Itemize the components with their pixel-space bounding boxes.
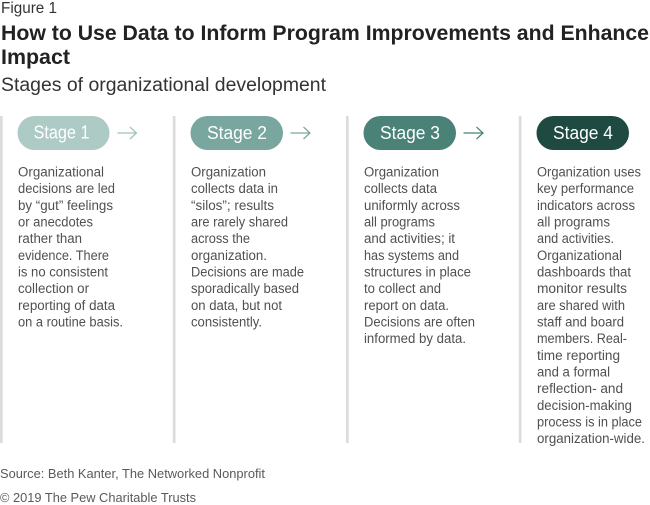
stage 2 description: organization. xyxy=(191,248,267,263)
stage 1 description: by “gut” feelings xyxy=(18,198,113,213)
stage 4 description xyxy=(537,164,645,446)
stage 1 pill xyxy=(18,116,110,150)
stage 2 pill xyxy=(190,116,283,150)
stage 2 description: consistently. xyxy=(191,314,262,330)
panel: stage 1 xyxy=(0,116,136,443)
title: How to Use Data to Inform Program Improvements and Enhance xyxy=(1,22,649,45)
stage 4 description: Organizational xyxy=(537,248,622,263)
stage 3 description: all programs xyxy=(364,214,435,230)
arrow: stage 1 to stage 2 xyxy=(118,127,136,139)
stage 2 description: Decisions are made xyxy=(191,264,304,280)
copyright: © 2019 The Pew Charitable Trusts xyxy=(0,490,196,505)
stage 3 description: report on data. xyxy=(364,298,449,313)
stage 4 description: monitor results xyxy=(537,281,627,296)
source note: Source: Beth Kanter, The Networked Nonprofit xyxy=(0,466,265,481)
stage 3 description: and activities; it xyxy=(364,231,455,246)
subtitle: Stages of organizational development xyxy=(1,75,327,96)
stage 3 description: has systems and xyxy=(364,248,459,263)
stage 3 description: structures in place xyxy=(364,264,471,280)
stage 1 description: is no consistent xyxy=(18,264,108,280)
stage 4 description: members. Real- xyxy=(537,331,627,346)
stage 4 description: dashboards that xyxy=(537,264,631,280)
stage 2 pill: Stage 2 xyxy=(207,123,267,143)
stage 2 description: are rarely shared xyxy=(191,214,288,230)
stage 2 description: on data, but not xyxy=(191,298,282,313)
stage 3 description: to collect and xyxy=(364,281,441,296)
stage 3 description: informed by data. xyxy=(364,331,466,346)
stage 3 pill xyxy=(364,116,456,150)
stage 4 description: organization-wide. xyxy=(537,431,645,446)
stage 3 description xyxy=(364,164,475,346)
stage 4 description: staff and board xyxy=(537,314,624,330)
title: Impact xyxy=(1,46,70,69)
stage 1 description: evidence. There xyxy=(18,248,109,263)
stage 2 description xyxy=(191,164,304,330)
stage 3 pill: Stage 3 xyxy=(380,123,440,143)
stage 1 pill: Stage 1 xyxy=(34,122,90,142)
stage 1 description: or anecdotes xyxy=(18,214,93,230)
stage 4 description: reflection- and xyxy=(537,381,623,396)
stage 2 description: collects data in xyxy=(191,181,278,196)
stage 4 description: and activities. xyxy=(537,231,614,246)
stage 4 description: process is in place xyxy=(537,414,642,430)
stage 3 description: Decisions are often xyxy=(364,314,475,330)
stage 2 description: “silos”; results xyxy=(191,198,274,213)
stage 4 description: all programs xyxy=(537,214,610,230)
panel: stage 4 xyxy=(519,116,645,446)
arrow: stage 2 to stage 3 xyxy=(290,127,310,139)
stage 4 pill xyxy=(536,116,629,150)
stage 4 description: key performance xyxy=(537,181,634,196)
stage 4 pill: Stage 4 xyxy=(553,123,613,143)
figure label: Figure 1 xyxy=(1,0,57,17)
panel: stage 2 xyxy=(173,116,310,443)
stage 3 description: collects data xyxy=(364,181,438,196)
stage 1 description: on a routine basis. xyxy=(18,314,123,330)
stage 2 description: across the xyxy=(191,231,250,246)
stage 3 description: Organization xyxy=(364,164,439,180)
title xyxy=(1,22,649,69)
stage 1 description: rather than xyxy=(18,231,82,246)
stage 2 description: sporadically based xyxy=(191,281,299,296)
stage 3 description: uniformly across xyxy=(364,198,460,213)
stage 4 description: time reporting xyxy=(537,348,620,363)
stage 1 description: reporting of data xyxy=(18,298,116,313)
stage 1 description: decisions are led xyxy=(18,181,115,196)
stage 4 description: and a formal xyxy=(537,364,610,380)
arrow: stage 3 to stage 4 xyxy=(464,127,483,139)
stage 4 description: Organization uses xyxy=(537,164,641,180)
stage 1 description: collection or xyxy=(18,281,90,296)
stage 4 description: indicators across xyxy=(537,198,635,213)
panel: stage 3 xyxy=(346,116,483,443)
stage 1 description xyxy=(18,164,123,330)
stage 4 description: are shared with xyxy=(537,298,625,313)
stage 2 description: Organization xyxy=(191,164,266,180)
stage 1 description: Organizational xyxy=(18,164,104,180)
stage 4 description: decision-making xyxy=(537,398,632,413)
